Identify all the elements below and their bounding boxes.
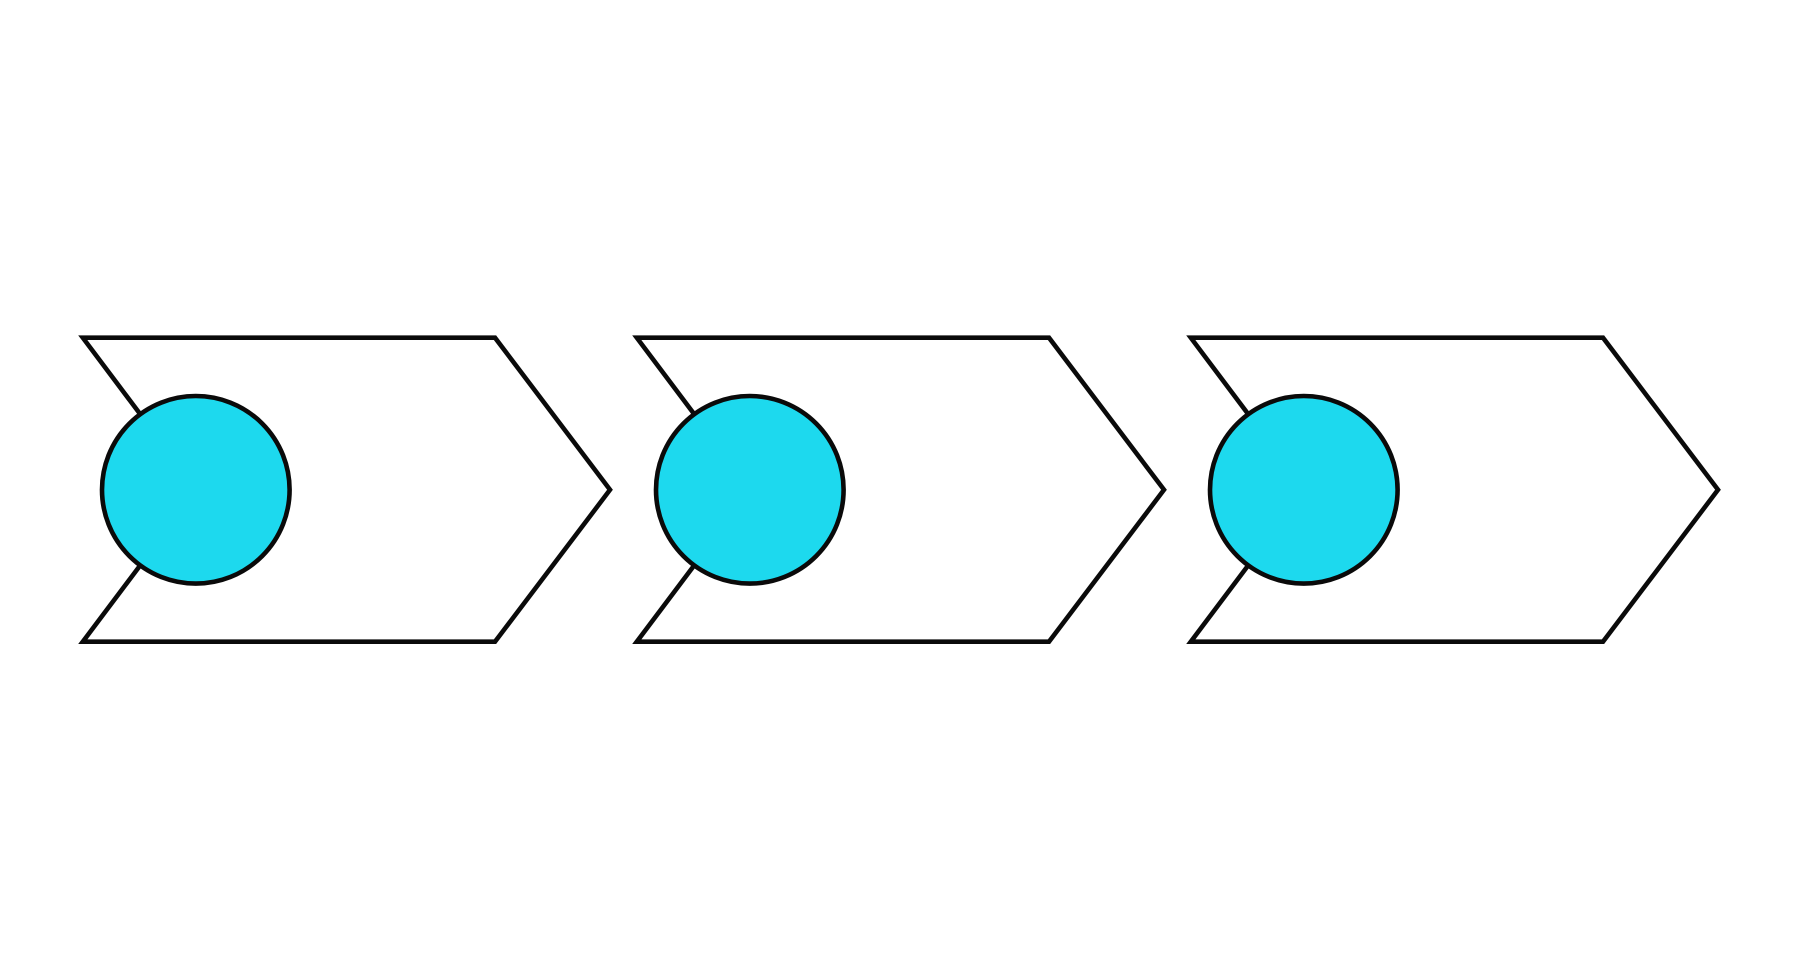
panel: step 2 — [637, 338, 1164, 642]
panel: step 1 — [83, 338, 610, 642]
arrow: step 1 chevron outline — [83, 338, 610, 642]
icon: step 3 blue circle — [1210, 396, 1398, 584]
panel: step 3 — [1191, 338, 1718, 642]
arrow: step 2 chevron outline — [637, 338, 1164, 642]
icon: step 1 blue circle — [102, 396, 290, 584]
arrow: step 3 chevron outline — [1191, 338, 1718, 642]
icon: step 2 blue circle — [656, 396, 844, 584]
